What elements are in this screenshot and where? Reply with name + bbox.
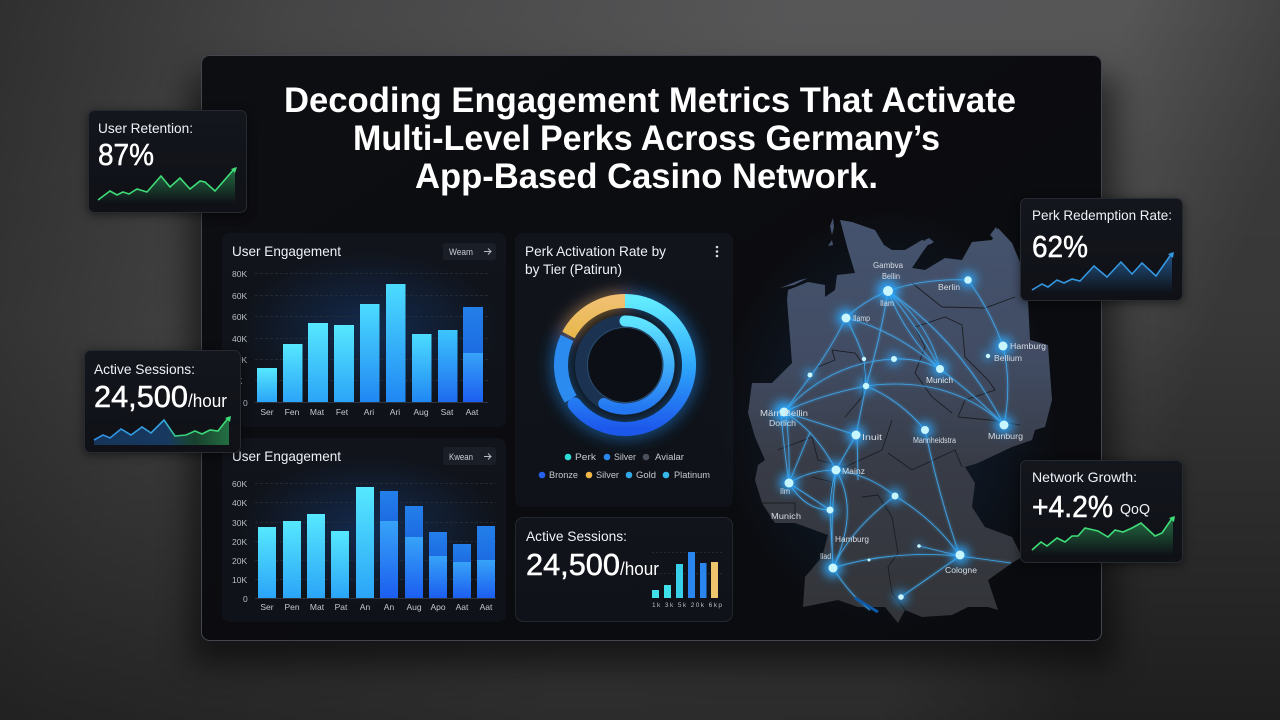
bar chart: user engagement bottom: 30K: [232, 518, 247, 528]
bar chart: user engagement top: 0: [243, 398, 248, 408]
bar chart: user engagement bottom: Mat: [310, 602, 325, 612]
callout: perk redemption rate: [1020, 198, 1183, 303]
legend: Silver: [596, 470, 619, 480]
bar chart: user engagement bottom: Aug: [406, 602, 422, 612]
active sessions value: 24,500: [526, 547, 620, 582]
bar chart: user engagement bottom: 10K: [232, 575, 247, 585]
legend: [539, 452, 710, 480]
heading: perk activation: by Tier (Patirun): [525, 261, 622, 277]
callout: network growth: [1020, 460, 1183, 565]
bar chart: user engagement bottom: Aat: [456, 602, 469, 612]
bar chart: user engagement top: Ser: [260, 407, 274, 417]
city labels: Dorlich: [769, 419, 796, 428]
bar chart: user engagement top: Ari: [390, 407, 400, 417]
legend: Perk: [575, 452, 597, 462]
city labels: Munburg: [988, 432, 1023, 441]
state borders: [762, 283, 1020, 610]
city labels: Ilm: [780, 487, 790, 496]
city labels: Ilam: [880, 299, 894, 308]
callout: active sessions: [84, 350, 241, 455]
active sessions label: Active Sessions:: [526, 528, 627, 544]
bar chart: user engagement bottom: 20K: [232, 556, 247, 566]
dropdown pill bottom: Kwean: [449, 452, 473, 462]
bar chart: user engagement top: 40K: [232, 334, 247, 344]
active sessions unit: /hour: [620, 559, 659, 579]
label: Active Sessions:: [94, 361, 195, 377]
legend: Silver: [614, 452, 636, 462]
node glow: [773, 272, 1013, 603]
bar chart: user engagement bottom: 40K: [232, 498, 247, 508]
dropdown pill bottom: [443, 447, 496, 465]
mini bar chart: 1k 3k 5k 20k 6kp: [652, 602, 722, 609]
value: +4.2%: [1032, 489, 1113, 524]
city labels: Cologne: [945, 566, 978, 575]
city labels: Gambva: [873, 261, 904, 270]
title: Multi-Level Perks Across Germany’s: [353, 119, 940, 158]
mini bar chart: [652, 552, 722, 609]
city labels: Munich: [771, 512, 801, 521]
title: [284, 81, 1016, 196]
bar chart: user engagement top: 20K: [232, 355, 247, 365]
bar chart: user engagement bottom: An: [384, 602, 394, 612]
title: App-Based Casino Network.: [415, 157, 878, 196]
coastline highlight: [855, 598, 878, 612]
bar chart: user engagement bottom: Apo: [430, 602, 446, 612]
panel: user engagement top: [222, 233, 506, 427]
label: Perk Redemption Rate:: [1032, 207, 1172, 223]
sparkline: [98, 167, 237, 203]
bar chart: user engagement top: 1K: [232, 376, 243, 386]
bar chart: user engagement bottom: 60K: [232, 479, 247, 489]
value: 62%: [1032, 229, 1088, 264]
label: User Retention:: [98, 120, 193, 136]
label: Network Growth:: [1032, 469, 1137, 485]
city labels: Berlin: [938, 283, 960, 292]
panel: user engagement bottom: [222, 438, 506, 622]
bar chart: user engagement top: Aug: [413, 407, 429, 417]
bar chart: user engagement top: 60K: [232, 291, 247, 301]
heading: perk activation: Perk Activation Rate by: [525, 243, 666, 259]
bar chart: user engagement bottom: Pen: [284, 602, 300, 612]
islands: [780, 218, 999, 288]
bar chart: user engagement bottom: Ser: [260, 602, 274, 612]
dropdown pill: [443, 243, 496, 260]
city labels: Hamburg: [1010, 342, 1046, 351]
bar chart: user engagement bottom: Pat: [335, 602, 348, 612]
bar chart: user engagement bottom: An: [360, 602, 370, 612]
network links: [781, 280, 1011, 610]
city labels: Inuit: [862, 433, 883, 442]
dropdown pill: Weam: [449, 247, 473, 257]
callout: user retention: [88, 110, 247, 215]
bar chart: user engagement top: 60K: [232, 312, 247, 322]
panel: active sessions mini: [516, 518, 732, 622]
icon: menu dots: [716, 246, 718, 257]
city labels: Bellin: [882, 272, 900, 281]
legend: Platinum: [674, 470, 710, 480]
title: Decoding Engagement Metrics That Activate: [284, 81, 1016, 120]
city labels: Hamburg: [835, 535, 869, 544]
bar chart: user engagement top: 80K: [232, 269, 247, 279]
sparkline: [1032, 516, 1175, 555]
city labels: Munich: [926, 376, 953, 385]
city labels: Ilad: [820, 552, 831, 561]
city labels: Märn Bellin: [760, 409, 808, 418]
legend: Avialar: [655, 452, 684, 462]
city labels: Mannheidstra: [913, 436, 956, 445]
bar chart: user engagement top: Ari: [364, 407, 374, 417]
city labels: Ilamp: [853, 314, 870, 323]
sparkline: [94, 416, 231, 445]
panel: perk activation rate: [515, 233, 733, 507]
bar chart: user engagement top: Sat: [441, 407, 454, 417]
bar chart: user engagement top: Fet: [336, 407, 349, 417]
donut chart: [559, 299, 691, 431]
bar chart: user engagement bottom: 20K: [232, 537, 247, 547]
bar chart: user engagement top: Mat: [310, 407, 325, 417]
legend: Gold: [636, 470, 656, 480]
bar chart: user engagement bottom: [232, 479, 496, 612]
value: 24,500: [94, 379, 188, 414]
value: 87%: [98, 137, 154, 172]
panel: main dashboard: [202, 56, 1102, 640]
bar chart: user engagement top: Aat: [466, 407, 479, 417]
heading: user engagement: User Engagement: [232, 243, 341, 259]
heading: user engagement bottom: User Engagement: [232, 448, 341, 464]
bar chart: user engagement top: [232, 269, 488, 417]
map: germany network: [720, 210, 1060, 630]
city labels: Mainz: [842, 467, 865, 476]
unit: QoQ: [1120, 501, 1150, 518]
city labels: Bellium: [994, 354, 1022, 363]
node cores: [780, 276, 1008, 600]
bar chart: user engagement bottom: Aat: [480, 602, 493, 612]
legend: Bronze: [549, 470, 578, 480]
sparkline: [1032, 252, 1174, 293]
map landmass: [748, 220, 1052, 623]
city labels: [760, 261, 1046, 575]
heading: perk activation: [525, 243, 666, 277]
bar chart: user engagement top: Fen: [285, 407, 300, 417]
unit: /hour: [188, 391, 227, 411]
bar chart: user engagement bottom: 0: [243, 594, 248, 604]
